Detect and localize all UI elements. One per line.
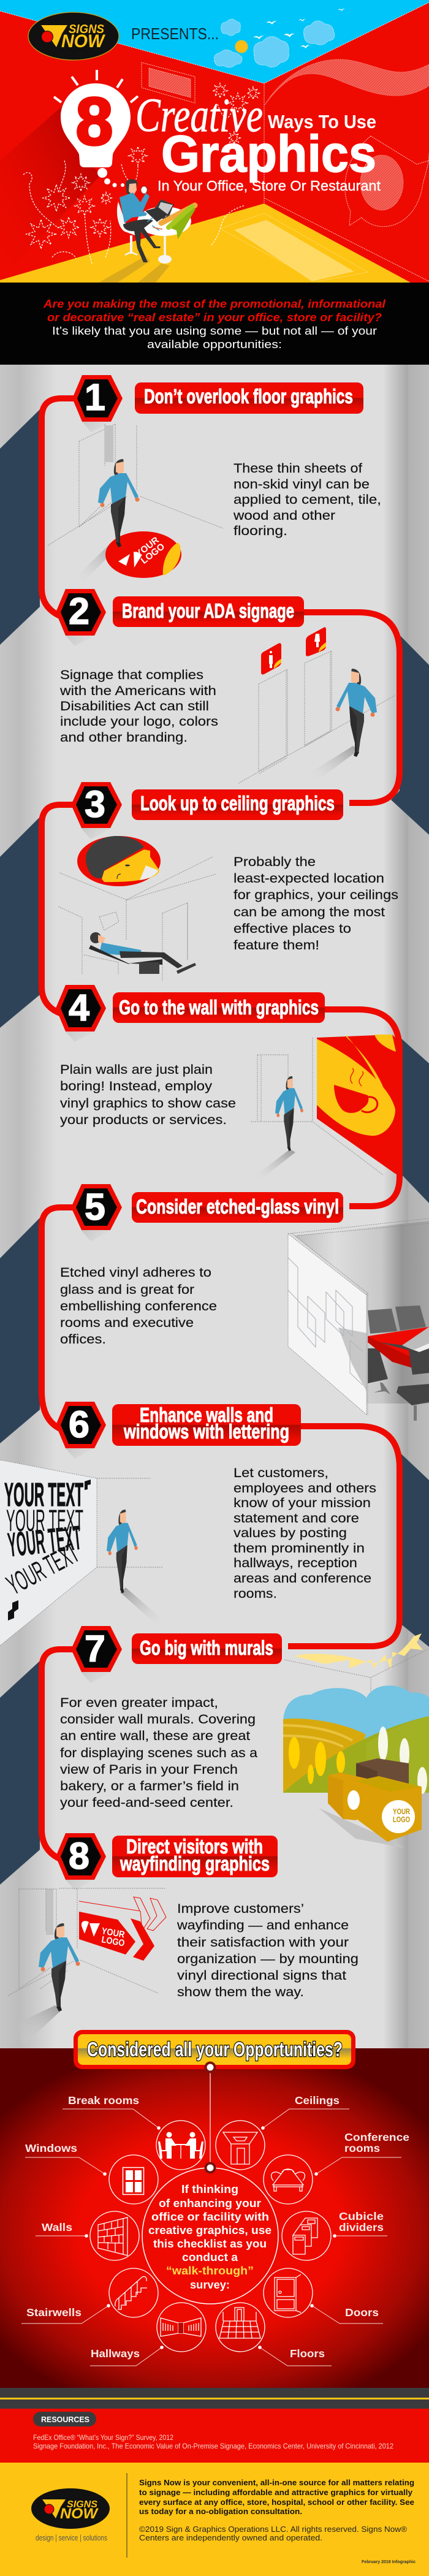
text 5: glass and is great for: [60, 1283, 194, 1297]
windows: Windows: [25, 2142, 77, 2154]
illustration: wayfinding sign: LOGO: [101, 1934, 126, 1949]
conference rooms: rooms: [344, 2142, 380, 2154]
illustration: ADA signs and doors: [238, 627, 395, 783]
badge 6: 6: [69, 1404, 89, 1445]
PRESENTS: PRESENTS...: [131, 25, 219, 43]
illustration: your text wall: [0, 1460, 164, 1646]
center circle text: creative graphics, use: [148, 2224, 271, 2236]
center circle text: conduct a: [182, 2251, 238, 2263]
text 6: Let customers,: [233, 1466, 328, 1480]
header panel: room illustration: [0, 0, 429, 283]
badge 1: 1: [85, 376, 105, 418]
floors: Floors: [290, 2347, 325, 2360]
title text: Creative: [135, 88, 263, 142]
step 3: [58, 782, 398, 981]
intro band: or decorative “real estate” in your office, store or facility?: [47, 311, 382, 324]
intro band: It’s likely that you are using some — but not all — of your: [52, 324, 377, 337]
text 8: wayfinding — and enhance: [177, 1918, 349, 1932]
wall picture: [142, 63, 195, 103]
footer logo: SIGNS: [67, 2499, 97, 2510]
text 2: with the Americans with: [59, 684, 216, 698]
title text: [135, 88, 381, 194]
illustration: wayfinding sign: YOUR: [101, 1926, 126, 1940]
text 8: Improve customers’: [177, 1902, 304, 1916]
stairwells: [21, 2268, 158, 2323]
hallways: [90, 2303, 206, 2366]
text 5: offices.: [60, 1332, 106, 1347]
text 7: an entire wall, these are great: [60, 1729, 250, 1743]
text 7: for displaying scenes such as a: [60, 1746, 257, 1760]
text 6: statement and core: [233, 1511, 359, 1525]
intro band: Are you making the most of the promotional, informational: [43, 297, 386, 310]
center vertical connector: [210, 2067, 211, 2168]
title 1: Don’t overlook floor graphics: [144, 385, 353, 408]
center circle text: of enhancing your: [159, 2197, 261, 2209]
title 8: [112, 1835, 278, 1877]
text 1: flooring.: [233, 524, 287, 538]
step 1: [48, 375, 381, 582]
title 8: Direct visitors with: [126, 1835, 263, 1858]
illustration: your text wall: YOUR TEXT: [4, 1476, 83, 1513]
title 4: [113, 992, 325, 1023]
footer: [0, 2463, 429, 2576]
right wall decorations: [264, 59, 429, 281]
text 3: feature them!: [233, 938, 319, 952]
stairwells: Stairwells: [26, 2306, 82, 2319]
divider band: [0, 2388, 429, 2409]
text 8: vinyl directional signs that: [177, 1969, 346, 1983]
text 8: organization — by mounting: [177, 1952, 359, 1966]
text 6: areas and conference: [233, 1571, 371, 1586]
title text: In Your Office, Store Or Restaurant: [158, 178, 381, 194]
step 5: [60, 1184, 429, 1421]
illustration: conference room with etched glass: [288, 1218, 429, 1421]
badge 1: [72, 375, 123, 432]
doors: Doors: [345, 2306, 379, 2319]
badge 5: [71, 1184, 122, 1241]
banner: [74, 2030, 355, 2069]
title text: Graphics: [161, 125, 376, 183]
ceilings: [216, 2094, 349, 2170]
center circle text: If thinking: [181, 2183, 238, 2195]
text 6: hallways, reception: [233, 1556, 357, 1570]
walls: Walls: [42, 2221, 72, 2233]
hallways: Hallways: [91, 2347, 140, 2360]
text 6: them prominently in: [233, 1541, 365, 1556]
footer: design | service | solutions: [36, 2533, 107, 2542]
resources band: Signage Foundation, Inc., The Economic Value of On-Premise Signage, Economics Center, University of Cincinnati, 2012: [33, 2442, 393, 2450]
text 6: rooms.: [233, 1587, 277, 1601]
text 2: Disabilities Act can still: [60, 699, 209, 713]
text 5: rooms and executive: [60, 1316, 194, 1330]
illustration: mural: [283, 1633, 429, 1848]
title 5: Consider etched-glass vinyl: [136, 1195, 339, 1218]
badge 6: [56, 1402, 106, 1459]
resources pill: [33, 2412, 96, 2426]
illustration: wall graphic: [251, 1035, 403, 1180]
connecting red route: [42, 398, 400, 1860]
footer text: Centers are independently owned and operated.: [139, 2534, 322, 2542]
title text: Ways To Use: [268, 111, 376, 132]
text 3: for graphics, your ceilings: [233, 888, 398, 902]
illustration: wayfinding sign: [8, 1888, 166, 2047]
badge 7: [71, 1626, 122, 1683]
man at table: [117, 179, 196, 264]
floral dashes: [23, 83, 259, 264]
step 8: [8, 1833, 359, 2047]
ceiling sky: [0, 0, 429, 83]
badge 5: 5: [85, 1186, 105, 1228]
badge 4: [56, 985, 106, 1042]
badge 4: 4: [69, 987, 89, 1028]
step 6: [0, 1402, 376, 1646]
text 6: values by posting: [233, 1526, 347, 1540]
text 8: show them the way.: [177, 1985, 304, 1999]
conference rooms: [264, 2131, 409, 2204]
title 4: Go to the wall with graphics: [119, 996, 319, 1019]
lightbulb with 8: 8: [75, 84, 113, 159]
logo top: NOW: [61, 31, 106, 51]
text 1: applied to cement, tile,: [233, 493, 381, 507]
opportunities panel: [0, 2030, 429, 2388]
title 6: Enhance walls and: [140, 1404, 273, 1426]
text 7: For even greater impact,: [60, 1696, 218, 1710]
lightbulb with 8: [54, 70, 138, 188]
center circle text: “walk-through”: [166, 2264, 254, 2277]
resources band: [0, 2409, 429, 2463]
text 7: bakery, or a farmer’s field in: [60, 1779, 239, 1793]
footer text: us today for a no-obligation consultation.: [139, 2507, 302, 2516]
resources band: FedEx Office® “What’s Your Sign?” Survey, 2012: [33, 2433, 173, 2442]
text 6: employees and others: [233, 1481, 376, 1495]
center circle text: this checklist as you: [153, 2237, 267, 2250]
title 5: [132, 1192, 343, 1223]
text 3: effective places to: [233, 922, 351, 936]
walls: [36, 2211, 139, 2260]
text 1: These thin sheets of: [233, 462, 362, 476]
text 4: your products or services.: [60, 1113, 227, 1127]
cubicle dividers: [282, 2210, 387, 2260]
illustration: ceiling graphic: [58, 836, 216, 981]
text 1: wood and other: [233, 509, 335, 523]
text 5: [60, 1266, 217, 1347]
footer logo: [31, 2488, 110, 2529]
footer text: [139, 2479, 414, 2542]
text 7: view of Paris in your French: [60, 1763, 238, 1777]
badge 3: [71, 782, 122, 839]
center circle text: office or facility with: [151, 2210, 269, 2223]
windows: [25, 2142, 158, 2204]
text 7: [60, 1696, 257, 1810]
title 3: Look up to ceiling graphics: [140, 792, 335, 815]
illustration: mural: LOGO: [393, 1815, 410, 1824]
center circle text: survey:: [190, 2278, 230, 2291]
badge 7: 7: [85, 1628, 105, 1670]
cubicle dividers: dividers: [339, 2221, 384, 2233]
title 8: wayfinding graphics: [120, 1852, 270, 1875]
title 1: [135, 382, 363, 414]
badge 8: 8: [69, 1835, 89, 1877]
illustration: your text wall: YOUR TEXT: [1, 1537, 84, 1601]
intro band: [0, 283, 429, 365]
text 3: Probably the: [233, 855, 316, 869]
ceilings: Ceilings: [295, 2094, 340, 2107]
text 7: your feed-and-seed center.: [60, 1796, 233, 1810]
illustration: floor graphic: [48, 424, 223, 582]
title 7: Go big with murals: [140, 1636, 273, 1659]
text 4: [60, 1063, 236, 1127]
wall background: [0, 365, 429, 2050]
title 2: Brand your ADA signage: [122, 599, 294, 622]
text 2: include your logo, colors: [60, 715, 218, 729]
intro band: available opportunities:: [147, 338, 282, 351]
badge 3: 3: [85, 783, 105, 825]
illustration: your text wall: YOUR TEXT: [6, 1518, 83, 1564]
footer text: ©2019 Sign & Graphics Operations LLC. All rights reserved. Signs Now®: [139, 2525, 408, 2534]
title 2: [113, 596, 304, 627]
logo top: SIGNS: [69, 23, 105, 36]
illustration: your text wall: YOUR TEXT: [6, 1503, 83, 1538]
step 4: [56, 985, 403, 1180]
title 6: windows with lettering: [123, 1420, 289, 1443]
footer text: Signs Now is your convenient, all-in-one source for all matters relating: [139, 2479, 414, 2487]
break rooms: Break rooms: [68, 2094, 139, 2107]
text 1: [233, 462, 381, 538]
text 6: [233, 1466, 376, 1601]
illustration: floor graphic: YOUR: [134, 535, 161, 560]
step 7: [60, 1626, 429, 1848]
floor: [0, 203, 411, 283]
title 7: [132, 1633, 282, 1664]
text 2: and other branding.: [60, 731, 188, 745]
text 7: consider wall murals. Covering: [60, 1712, 256, 1727]
badge 8: [56, 1833, 106, 1890]
badge 2: 2: [69, 590, 89, 632]
badge 2: [56, 589, 106, 646]
footer text: to signage — including affordable and attractive graphics for virtually: [139, 2488, 412, 2497]
title 3: [132, 789, 343, 820]
text 1: non-skid vinyl can be: [233, 477, 370, 492]
text 8: [177, 1902, 359, 1999]
text 5: embellishing conference: [60, 1299, 217, 1313]
text 4: Plain walls are just plain: [60, 1063, 213, 1077]
text 6: know of your mission: [233, 1496, 371, 1510]
text 4: vinyl graphics to show case: [60, 1096, 236, 1111]
title 6: [112, 1404, 301, 1446]
floors: [216, 2303, 332, 2366]
banner: Considered all your Opportunities?: [87, 2038, 343, 2061]
bulb shadow on wall: [0, 105, 101, 280]
footer: February 2019 Infographic: [362, 2560, 416, 2564]
text 2: Signage that complies: [60, 668, 203, 682]
logo top: [28, 12, 119, 60]
text 5: Etched vinyl adheres to: [60, 1266, 211, 1280]
conference rooms: Conference: [344, 2131, 409, 2143]
doors: [264, 2268, 383, 2323]
text 2: [59, 668, 218, 745]
text 4: boring! Instead, employ: [60, 1079, 213, 1093]
illustration: mural: YOUR: [393, 1807, 410, 1816]
text 3: can be among the most: [233, 905, 385, 919]
illustration: floor graphic: LOGO: [139, 541, 167, 566]
resources pill: RESOURCES: [41, 2415, 89, 2424]
footer logo: NOW: [60, 2506, 99, 2522]
text 3: least-expected location: [233, 872, 384, 886]
text 3: [233, 855, 398, 952]
cubicle dividers: Cubicle: [339, 2210, 384, 2222]
text 8: their satisfaction with your: [177, 1936, 349, 1950]
footer text: every surface at any office, store, hospital, school or other facility. See: [139, 2498, 414, 2507]
break rooms: [63, 2094, 205, 2170]
center circle text: [142, 2162, 278, 2304]
step 2: [56, 589, 395, 783]
